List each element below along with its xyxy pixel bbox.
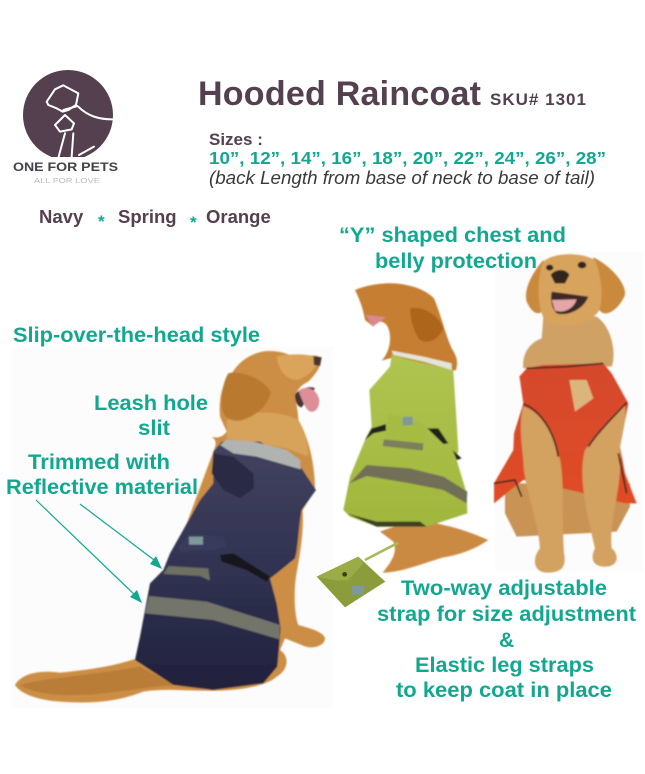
- coat hem shadow: [347, 513, 427, 527]
- haunches: [505, 483, 630, 537]
- pocket flap: [178, 533, 227, 552]
- callout: adjustable strap and leg straps: strap for size adjustment: [377, 603, 636, 626]
- callout: reflective material: [6, 451, 198, 499]
- logo wordmark: ONE FOR PETS: [13, 160, 118, 174]
- hood shadow: [212, 453, 254, 498]
- left ear: [526, 260, 547, 313]
- coat: [135, 442, 316, 690]
- colour options: [39, 206, 271, 232]
- callout: Y shaped chest: belly protection: [375, 250, 537, 273]
- chest fur stripe: [569, 380, 593, 412]
- ear: [221, 373, 271, 421]
- left strap: [365, 424, 386, 440]
- callout: reflective material: Trimmed with: [28, 451, 170, 474]
- upper reflective stripe: [163, 566, 210, 581]
- hood lining: [220, 439, 301, 469]
- callout: leash hole slit: [94, 392, 208, 440]
- neck ruff: [227, 412, 308, 457]
- colour options: Spring: [118, 206, 177, 227]
- adjustable strap: [220, 553, 270, 582]
- logo tagline: ALL FOR LOVE: [34, 176, 100, 185]
- tongue: [366, 315, 386, 327]
- tongue: [298, 388, 319, 412]
- nose and mouth: [295, 356, 322, 407]
- title: Hooded Raincoat: [198, 75, 481, 113]
- muzzle: [277, 354, 318, 380]
- callout: adjustable strap and leg straps: &: [499, 629, 514, 652]
- right ear: [593, 257, 625, 313]
- callout: leash hole slit: Leash hole: [94, 392, 208, 415]
- pocket tag: [189, 537, 203, 545]
- ear: [410, 308, 443, 342]
- photo: navy raincoat dog: [12, 347, 333, 708]
- left foreleg: [521, 407, 565, 573]
- pocket tag: [403, 417, 413, 425]
- photo: orange raincoat dog: [494, 252, 643, 573]
- chest fur: [523, 317, 614, 368]
- callout: adjustable strap and leg straps: Two-way adjustable: [401, 577, 607, 600]
- sizes label: Sizes :: [209, 130, 263, 149]
- photo: spring green raincoat dog: [343, 283, 488, 573]
- head and neck: [355, 283, 457, 371]
- colour options: *: [190, 213, 197, 232]
- tail: [380, 522, 488, 573]
- reflective stripe: [349, 465, 467, 503]
- logo mark: circle with dog line art: [23, 70, 113, 160]
- callout: Y shaped chest: “Y” shaped chest and: [339, 224, 566, 247]
- right strap: [427, 428, 462, 460]
- eyes and nose: [546, 262, 586, 283]
- arrow: to upper stripe: [80, 504, 162, 569]
- callout: adjustable strap and leg straps: [377, 577, 636, 702]
- coat: [494, 363, 637, 503]
- pocket flap: [383, 413, 427, 452]
- callout: adjustable strap and leg straps: to keep coat in place: [396, 679, 612, 702]
- lower reflective stripe: [145, 596, 280, 639]
- colour options: Navy: [39, 206, 84, 227]
- arrow: to lower stripe: [36, 500, 142, 603]
- colour options: *: [98, 212, 105, 231]
- tail shading: [20, 667, 173, 695]
- coat: [343, 355, 467, 527]
- pocket stripe: [383, 439, 423, 451]
- callout: reflective material: Reflective material: [6, 476, 198, 499]
- dog body: [15, 351, 325, 702]
- hood lining: [392, 351, 452, 370]
- right foreleg: [582, 405, 625, 567]
- colour options: Orange: [206, 206, 271, 227]
- sizes note: (back Length from base of neck to base of tail): [209, 168, 595, 188]
- callout: leash hole slit: slit: [138, 417, 170, 440]
- SKU: SKU# 1301: [490, 90, 586, 109]
- tongue: [552, 299, 577, 311]
- mouth: [551, 292, 588, 314]
- pouch: folded raincoat: [317, 543, 398, 607]
- logo: One For Pets: [13, 70, 118, 185]
- head: [538, 254, 601, 326]
- callout: slip-over style: Slip-over-the-head style: [13, 324, 260, 347]
- coat trim: [494, 363, 627, 497]
- callout: adjustable strap and leg straps: Elastic leg straps: [415, 654, 594, 677]
- sizes block: [209, 130, 606, 188]
- sizes list: 10”, 12”, 14”, 16”, 18”, 20”, 22”, 24”, 26”, 28”: [209, 148, 606, 168]
- callout: Y shaped chest: [339, 224, 566, 273]
